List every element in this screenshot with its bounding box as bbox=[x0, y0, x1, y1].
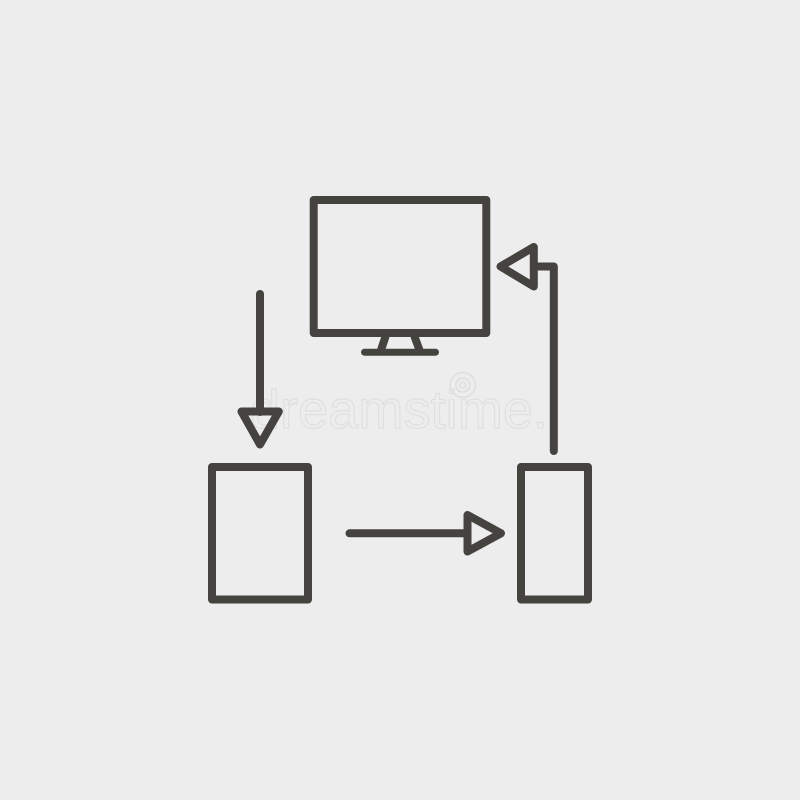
icon: device cycle bbox=[212, 200, 588, 600]
arrow: tablet to phone bbox=[350, 515, 501, 552]
watermark spiral bbox=[450, 372, 475, 398]
arrow: phone to monitor bbox=[500, 247, 554, 451]
arrow: monitor to tablet bbox=[242, 294, 279, 444]
watermark bbox=[250, 372, 548, 440]
watermark wordmark: dreamstime. bbox=[250, 380, 548, 440]
icon: desktop monitor bbox=[314, 200, 486, 352]
icon: tablet bbox=[212, 467, 308, 600]
icon: phone bbox=[521, 467, 588, 600]
